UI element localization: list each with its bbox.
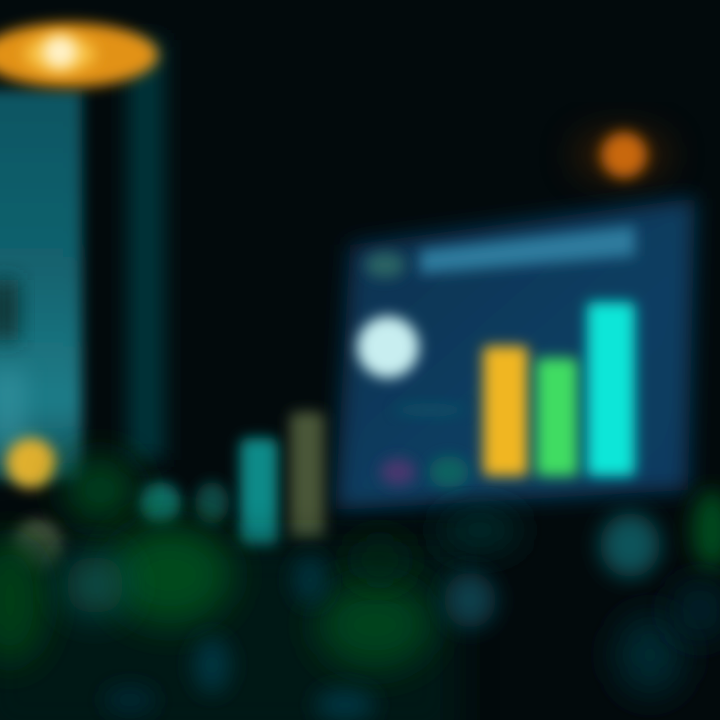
- bar: cyan: [587, 302, 635, 476]
- small legend dots: [380, 403, 469, 488]
- lamp: orange ceiling light: [0, 23, 158, 87]
- panel heading bar: [420, 226, 635, 274]
- heading icon: [365, 252, 405, 278]
- icon: glowing circle: [357, 316, 419, 378]
- lights: yellow and tan orbs: [6, 438, 63, 570]
- panel: dashboard screen: [335, 198, 695, 510]
- foliage: foreground plants: [0, 456, 720, 720]
- distant orange light: [574, 131, 670, 179]
- bar: green: [536, 358, 578, 476]
- tower: left glass building: [0, 40, 164, 480]
- bar: yellow: [483, 346, 528, 476]
- bar chart: [483, 302, 635, 476]
- background bars: small chart left of panel: [139, 412, 324, 546]
